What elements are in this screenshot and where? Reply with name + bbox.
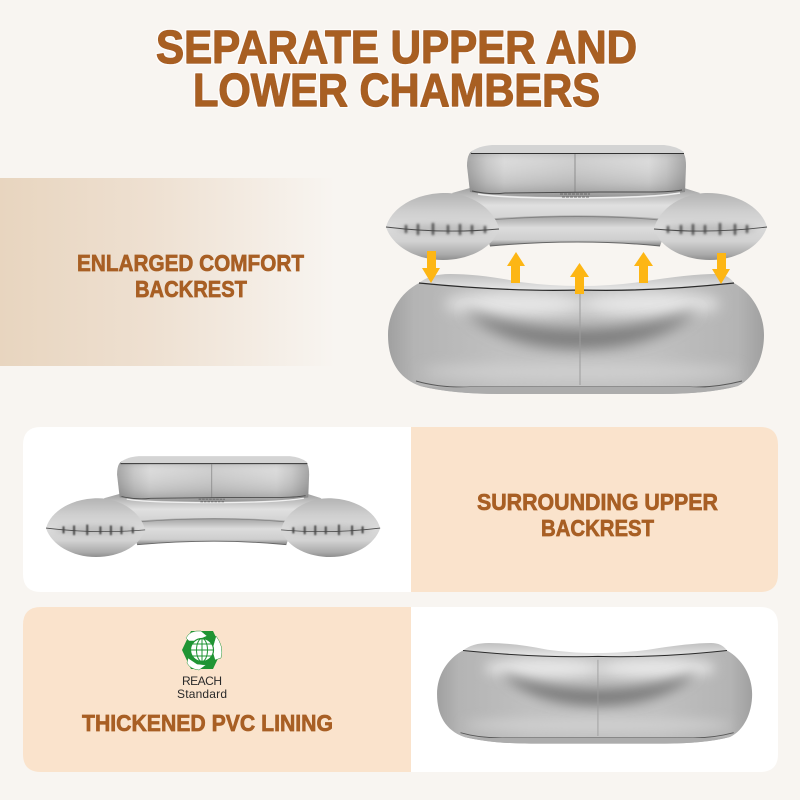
product: lower chamber — [388, 274, 764, 394]
heading: thickened pvc lining: THICKENED PVC LINING — [82, 710, 333, 736]
panel: surrounding upper backrest — [23, 427, 778, 592]
arrows: yellow inflation directions — [422, 251, 730, 294]
diagram: separated chambers with arrows — [386, 145, 767, 394]
text: REACH Standard: REACH — [182, 674, 222, 688]
panel: enlarged comfort backrest — [0, 178, 335, 366]
heading: surrounding upper backrest: SURROUNDING UPPER — [477, 489, 718, 515]
title: LOWER CHAMBERS — [193, 64, 600, 116]
heading: enlarged comfort backrest: ENLARGED COMFORT — [77, 250, 304, 276]
icon: REACH recycling globe — [182, 631, 222, 670]
heading: enlarged comfort backrest: BACKREST — [135, 276, 247, 302]
title — [156, 21, 637, 116]
product: upper chamber — [386, 145, 767, 260]
heading: surrounding upper backrest: BACKREST — [541, 515, 654, 541]
panel: thickened pvc lining — [23, 607, 778, 772]
product: lower chamber alone — [437, 643, 752, 744]
product: upper chamber alone — [46, 456, 380, 557]
heading: enlarged comfort backrest — [77, 250, 304, 302]
heading: surrounding upper backrest — [477, 489, 718, 541]
title: SEPARATE UPPER AND — [156, 21, 637, 73]
text: REACH Standard — [177, 674, 227, 701]
text: REACH Standard: Standard — [177, 687, 227, 701]
